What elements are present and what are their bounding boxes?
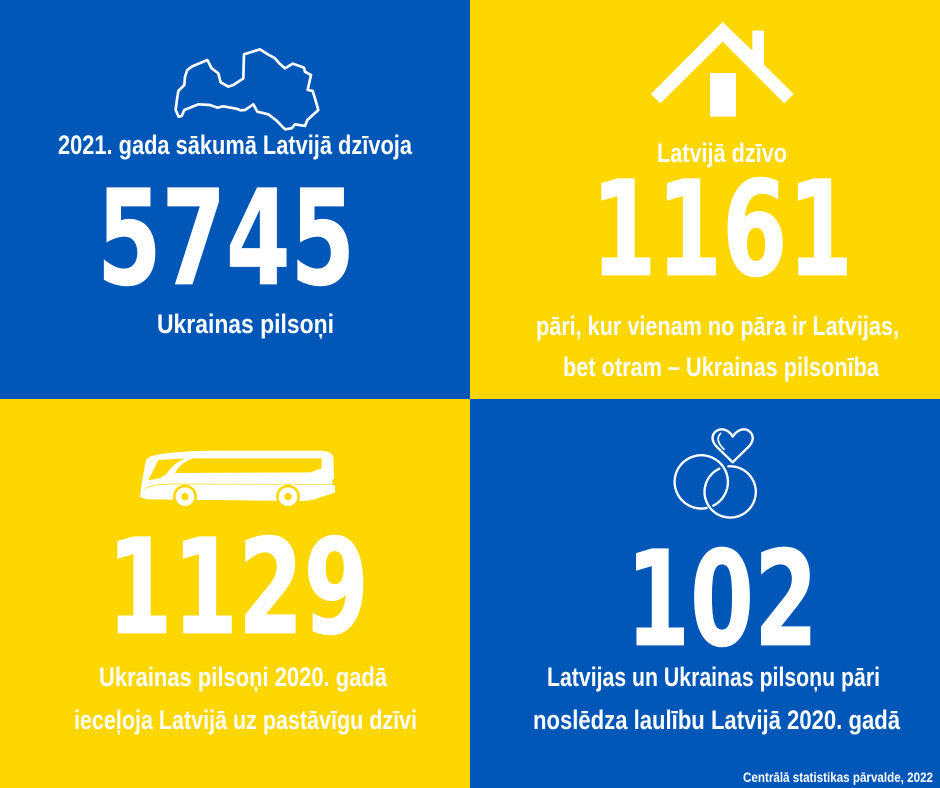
text: marriages description — [533, 662, 901, 735]
text: immigration description — [74, 662, 417, 735]
panel: bottom right, marriages — [470, 399, 940, 788]
icon: rings with heart — [675, 429, 756, 518]
text: immigration description: ieceļoja Latvijā uz pastāvīgu dzīvi — [74, 705, 417, 735]
label: Ukrainian citizens: Ukrainas pilsoņi — [157, 309, 334, 339]
number: 102: 102 — [626, 523, 818, 677]
heading: residents intro: 2021. gada sākumā Latvijā dzīvoja — [58, 130, 413, 160]
text: immigration description: Ukrainas pilsoņi 2020. gadā — [99, 662, 388, 692]
heading: couples intro: Latvijā dzīvo — [657, 138, 787, 168]
panel: top right, couples — [470, 0, 940, 399]
icon: house — [651, 22, 794, 117]
number: 5745: 5745 — [97, 162, 355, 316]
text: couples description — [536, 311, 899, 382]
panel: bottom left, immigration — [0, 399, 470, 788]
icon: bus — [140, 451, 335, 509]
panel: top left, residents — [0, 0, 470, 399]
icon: Latvia outline — [176, 49, 318, 129]
number: 1129: 1129 — [107, 511, 369, 665]
